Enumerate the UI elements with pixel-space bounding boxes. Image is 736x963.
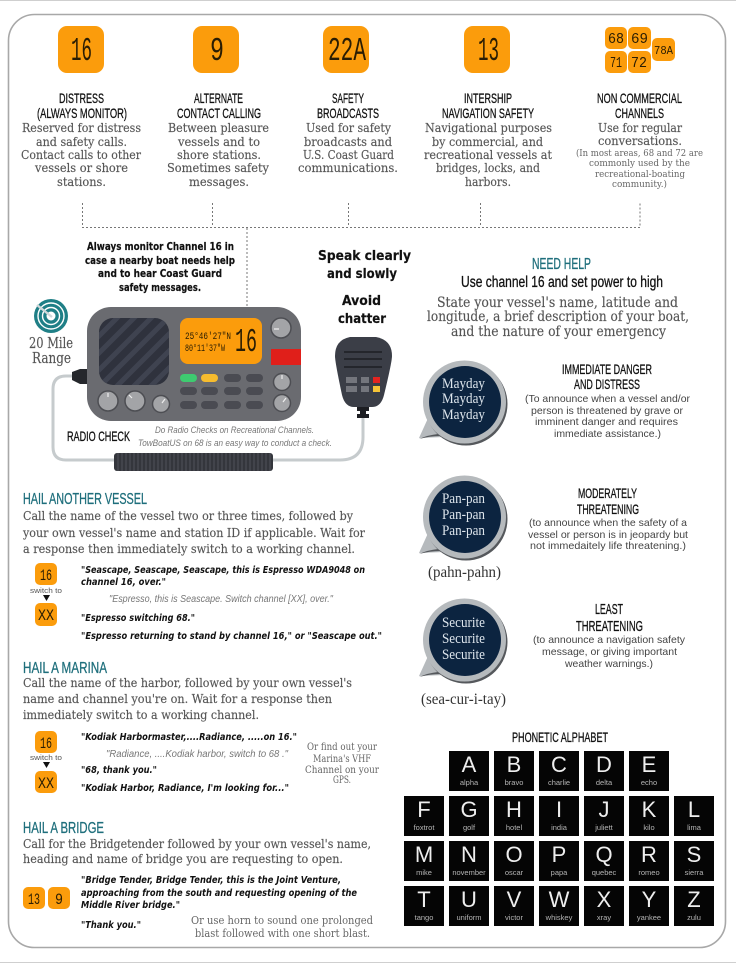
script: hail vessel dialogue: "Espresso switching 68." [81,613,195,624]
tile: B: B [507,752,521,777]
channel 13 column [424,26,552,189]
heading: need help: NEED HELP [532,256,591,273]
tile: J: J [598,797,610,822]
tile: Y: yankee [637,913,661,922]
tile: D [584,751,624,791]
section: hail a bridge [23,820,374,940]
text: immediate danger [525,361,690,440]
heading: intership navigation safety: NAVIGATION SAFETY [442,105,534,121]
subheading: use channel 16: Use channel 16 and set power to high [461,274,663,291]
script: hail bridge dialogue: "Thank you." [81,920,141,931]
tile: G [449,796,489,836]
icon: non commercial channel badges [605,27,675,73]
radio check note: Do Radio Checks on Recreational Channels. [155,425,314,436]
text: immediate danger: immediate assistance.) [554,428,661,440]
tile: B [494,751,534,791]
text: distress description: and safety calls. [36,134,127,149]
tile: X: X [597,887,612,912]
icon: non commercial channel badges: 68 [608,31,624,48]
tile: B: bravo [505,778,523,787]
callout: speak clearly: chatter [338,311,386,327]
script: hail vessel dialogue: "Seascape, Seascape, Seascape, this is Espresso WDA9048 on [81,565,365,576]
cable coil [114,453,273,471]
icon: non commercial channel badges: 71 [610,55,622,72]
tile: C [539,751,579,791]
pronunciation: sea-cur-i-tay: (sea-cur-i-tay) [421,691,506,708]
channel 22A column [298,26,398,175]
tile: H [494,796,534,836]
text: moderately threatening: THREATENING [577,501,639,517]
tile: D: D [596,752,612,777]
tile: Q: Q [595,842,613,867]
script: hail vessel dialogue: "Espresso returning to stand by channel 16," or "Seascape out." [81,631,382,642]
radio red button [271,349,301,365]
heading: intership navigation safety [442,90,534,121]
text: non commercial description: Use for regular [598,120,682,135]
tile: C: C [551,752,567,777]
callout: speak clearly: Avoid [342,293,381,309]
heading: hail another vessel: HAIL ANOTHER VESSEL [23,491,147,508]
tile: O: oscar [505,868,524,877]
tile: V: V [507,887,522,912]
channel 16 column [21,26,141,189]
speech bubble: securite: Securite [442,647,485,663]
heading: intership navigation safety: INTERSHIP [464,90,512,106]
text: hail bridge instructions: heading and name of bridge you are requesting to open. [23,851,343,866]
script: hail marina dialogue: "68, thank you." [81,765,157,776]
radio check note: TowBoatUS on 68 is an easy way to conduct a check. [138,438,332,449]
note: find marina channel on GPS [305,741,380,786]
radio display [180,318,262,364]
text: immediate danger: imminent danger and requires [535,416,678,428]
text: hail marina instructions: name and channel you're on. Wait for a response then [23,691,332,706]
radio buttons [180,374,263,409]
text: least threatening: weather warnings.) [564,658,653,670]
radio body [87,307,301,421]
tile: Y [629,886,669,926]
tile: L: lima [687,823,702,832]
tile: H: H [506,797,522,822]
text: non commercial description: recreational-boating [595,169,685,180]
heading: safety broadcasts [317,90,379,121]
text: hail vessel instructions: Call the name of the vessel two or three times, followed by [23,508,354,523]
icon: switch from 16 to XX: 16 [40,735,52,753]
tile: S: S [687,842,701,867]
text: alternate calling description: Sometimes safety [167,160,270,175]
speech bubble: mayday [419,360,508,446]
pronunciation: pahn-pahn: (pahn-pahn) [428,564,501,581]
icon: switch from 16 to XX: switch to [30,586,62,595]
speech bubble: securite: Securite [442,631,485,647]
tile: M [404,841,444,881]
tile: O: O [505,842,523,867]
tile: P: papa [551,868,568,877]
text: hail marina instructions [23,675,352,722]
text: moderately threatening: MODERATELY [578,485,637,501]
radio check note [138,425,332,449]
heading: safety broadcasts: SAFETY [332,90,364,106]
text: hail vessel instructions: your own vessel's name and station ID if applicable. Wait for [22,525,365,540]
text: distress description [21,120,141,189]
text: non commercial description: conversations. [598,133,682,148]
tile: Y: Y [642,887,657,912]
tile: Q [584,841,624,881]
script: hail marina dialogue [81,732,297,794]
tile: P [539,841,579,881]
callout: speak clearly: and slowly [327,266,397,282]
icon: channels 13 and 9: 13 [28,891,40,909]
text: need help instructions: and the nature of your emergency [451,324,666,340]
tile: Q: quebec [592,868,617,877]
icon: switch from 16 to XX: XX [38,607,54,625]
tile: N: N [461,842,477,867]
tile: W [539,886,579,926]
heading: distress: DISTRESS [59,90,104,106]
heading: non commercial channels: NON COMMERCIAL [597,90,682,106]
text: least threatening: message, or giving important [542,646,677,658]
text: need help instructions [427,295,689,340]
text: non commercial description: (In most areas, 68 and 72 are [576,148,703,159]
tile: K [629,796,669,836]
note: find marina channel on GPS: Or find out your [307,741,378,753]
script: hail vessel dialogue: "Espresso, this is Seascape. Switch channel [XX], over." [109,594,333,605]
text: distress description: vessels or shore [34,160,128,175]
icon: channel 13: 13 [478,33,499,70]
callout: always monitor channel 16: and to hear Coast Guard [98,267,222,280]
connector: dotted lines from channels to radio [82,203,640,306]
tile: P: P [552,842,566,867]
text: moderately threatening: vessel or person is in jeopardy but [528,529,688,541]
text: hail marina instructions: Call the name of the harbor, followed by your own vessel's [23,675,352,690]
tile: G: G [460,797,478,822]
tile: A: A [462,752,477,777]
radio display: 16 [235,324,257,361]
text: distress description: Reserved for distress [22,120,141,135]
callout: always monitor channel 16: case a nearby boat needs help [85,254,235,267]
callout: always monitor channel 16 [85,240,235,294]
heading: non commercial channels: CHANNELS [615,105,664,121]
callout: always monitor channel 16: safety messages. [119,281,201,294]
text: intership description: by commercial, and [432,134,543,149]
speech bubble: securite [419,598,508,684]
icon: non commercial channel badges: 72 [631,55,647,72]
tile: L: L [688,797,700,822]
text: alternate calling description: messages. [189,174,249,189]
tile: Z [674,886,714,926]
text: moderately threatening: (to announce when the safety of a [529,517,687,529]
text: intership description: bridges, locks, and [436,160,540,175]
text: alternate calling description: Between pleasure [168,120,269,135]
tile: E [629,751,669,791]
icon: channel 16 [58,26,104,73]
speech bubble: mayday: Mayday [442,376,485,392]
script: hail bridge dialogue: Middle River bridge." [81,900,180,911]
chart: phonetic alphabet tiles [404,751,714,926]
script: hail marina dialogue: "Kodiak Harbormaster,....Radiance, .....on 16." [81,732,297,743]
tile: W: whiskey [545,913,573,922]
icon: handheld microphone [335,337,392,418]
tile: W: W [549,887,570,912]
text: alternate calling description [167,120,270,189]
tile: I: I [556,797,562,822]
text: 20 mile range: 20 Mile [29,336,73,352]
tile: F: foxtrot [414,823,435,832]
text: immediate danger: IMMEDIATE DANGER [562,361,652,377]
text: alternate calling description: shore stations. [177,147,261,162]
text: safety broadcasts description: Used for safety [306,120,392,135]
icon: channels 13 and 9: 9 [55,891,63,909]
radio unit [72,305,301,421]
heading: alternate contact calling [177,90,261,121]
tile: R: R [641,842,657,867]
icon: channel 9: 9 [210,33,224,70]
speech bubble: pan-pan: Pan-pan [442,523,485,539]
icon: channel 16: 16 [71,33,92,70]
tile: D: delta [596,778,613,787]
script: hail vessel dialogue: channel 16, over." [81,577,166,588]
icon: non commercial channel badges: 78A [654,44,674,58]
radio speaker grille [99,318,169,385]
icon: switch from 16 to XX: 16 [40,567,52,585]
text: alternate calling description: vessels and to [177,134,260,149]
tile: U: U [461,887,477,912]
radio display: 25°46'27"N [185,331,231,343]
text: safety broadcasts description [298,120,398,175]
speech bubble: mayday: Mayday [442,391,485,407]
tile: E: echo [641,778,657,787]
text: intership description: harbors. [465,174,511,189]
tile: I [539,796,579,836]
tile: T: T [417,887,431,912]
tile: F [404,796,444,836]
script: hail bridge dialogue: approaching from the south and requesting opening of the [81,888,357,899]
icon: switch from 16 to XX: switch to [30,753,62,762]
tile: L [674,796,714,836]
text: intership description: recreational vessels at [424,147,552,162]
note: find marina channel on GPS: GPS. [333,774,351,786]
speech bubble: mayday: Mayday [442,407,485,423]
tile: V: victor [505,913,523,922]
text: least threatening: LEAST [595,601,623,618]
tile: R: romeo [638,868,660,877]
speech bubble: pan-pan [419,476,508,560]
icon: channel 13 [464,26,510,73]
note: use horn [191,913,374,940]
tile: F: F [417,797,431,822]
tile: S: sierra [685,868,704,877]
note: use horn: Or use horn to sound one prolonged [191,913,374,927]
tile: V [494,886,534,926]
speech bubble: pan-pan: Pan-pan [442,507,485,523]
section: hail another vessel [22,491,382,642]
tile: U [449,886,489,926]
text: least threatening: (to announce a navigation safety [533,634,686,646]
tile: X: xray [597,913,611,922]
radio knobs [98,318,291,412]
icon: radar range [34,299,68,333]
heading: alternate contact calling: CONTACT CALLING [177,105,261,121]
icon: switch from 16 to XX [30,731,62,793]
text: immediate danger: person is threatened by grave or [531,405,683,417]
text: 20 mile range [29,336,73,367]
icon: non commercial channel badges: 69 [631,31,648,48]
text: immediate danger: AND DISTRESS [574,376,640,392]
note: find marina channel on GPS: Marina's VHF [313,753,371,765]
script: hail marina dialogue: "Radiance, ....Kodiak harbor, switch to 68 ." [106,749,288,760]
section: need help [427,256,689,340]
heading: non commercial channels [597,90,682,121]
tile: G: golf [463,823,476,832]
tile: A: alpha [460,778,479,787]
tile: T: tango [415,913,433,922]
cable: radio to microphone [53,376,363,460]
heading: alternate contact calling: ALTERNATE [194,90,243,106]
text: hail bridge instructions [23,836,371,866]
text: least threatening [533,601,686,670]
tile: U: uniform [456,913,482,922]
radio display: 80°11'37"W [185,343,225,355]
text: least threatening: THREATENING [576,618,643,635]
text: need help instructions: State your vessel's name, latitude and [437,295,678,311]
tile: H: hotel [506,823,522,832]
text: 20 mile range: Range [32,351,71,367]
tile: Z: zulu [687,913,701,922]
tile: T [404,886,444,926]
text: safety broadcasts description: U.S. Coast Guard [303,147,394,162]
script: hail bridge dialogue [81,875,357,931]
text: moderately threatening [528,485,688,552]
script: hail bridge dialogue: "Bridge Tender, Bridge Tender, this is the Joint Venture, [81,875,341,886]
text: non commercial description [576,120,703,190]
text: safety broadcasts description: communications. [298,160,398,175]
script: hail marina dialogue: "Kodiak Harbor, Radiance, I'm looking for..." [81,783,289,794]
text: hail marina instructions: immediately switch to a working channel. [23,707,259,722]
heading: phonetic alphabet: PHONETIC ALPHABET [512,729,608,745]
text: need help instructions: longitude, a brief description of your boat, [427,309,689,325]
cable plug [72,369,87,384]
non commercial channels column [576,27,703,190]
text: non commercial description: community.) [612,179,667,190]
heading: distress: (ALWAYS MONITOR) [37,105,127,121]
tile: E: E [642,752,656,777]
text: hail bridge instructions: Call for the Bridgetender followed by your own vessel's name, [23,836,371,851]
callout: speak clearly [318,248,411,327]
text: moderately threatening: not immedaitely life threatening.) [530,540,686,552]
icon: channels 13 and 9 [23,887,70,909]
text: safety broadcasts description: broadcasts and [304,134,392,149]
tile: R [629,841,669,881]
text: hail vessel instructions: a response then immediately switch to a working channel. [23,541,355,556]
icon: channel 22A: 22A [328,33,366,70]
tile: O [494,841,534,881]
note: find marina channel on GPS: Channel on your [305,764,380,776]
text: distress description: stations. [57,174,106,189]
tile: A [449,751,489,791]
channel 9 column [167,26,270,189]
callout: speak clearly: Speak clearly [318,248,411,264]
text: immediate danger: (To announce when a vessel and/or [525,393,690,405]
icon: channel 9 [193,26,239,73]
tile: N: november [452,868,486,877]
heading: distress [37,90,127,121]
radio check heading: RADIO CHECK [67,428,130,444]
icon: switch from 16 to XX [30,563,62,626]
heading: hail a marina: HAIL A MARINA [23,660,107,677]
text: intership description [424,120,552,189]
text: distress description: Contact calls to other [21,147,141,162]
note: use horn: blast followed with one short blast. [195,926,370,940]
tile: C: charlie [548,778,570,787]
tile: S [674,841,714,881]
tile: M: M [415,842,433,867]
text: non commercial description: commonly used by the [589,158,690,169]
icon: switch from 16 to XX: XX [38,775,54,793]
tile: N [449,841,489,881]
text: intership description: Navigational purposes [425,120,552,135]
tile: I: india [551,823,568,832]
tile: Z: Z [687,887,701,912]
tile: K: kilo [643,823,655,832]
heading: hail a bridge: HAIL A BRIDGE [23,820,104,837]
tile: M: mike [416,868,432,877]
speech bubble: pan-pan: Pan-pan [442,491,485,507]
tile: K: K [642,797,657,822]
icon: channel 22A [323,26,369,73]
tile: X [584,886,624,926]
tile: J: juliett [594,823,614,832]
speech bubble: securite: Securite [442,615,485,631]
script: hail vessel dialogue [81,565,382,642]
text: hail vessel instructions [22,508,365,556]
section: hail a marina [23,660,380,794]
tile: J [584,796,624,836]
heading: safety broadcasts: BROADCASTS [317,105,379,121]
callout: always monitor channel 16: Always monitor Channel 16 in [87,240,234,253]
